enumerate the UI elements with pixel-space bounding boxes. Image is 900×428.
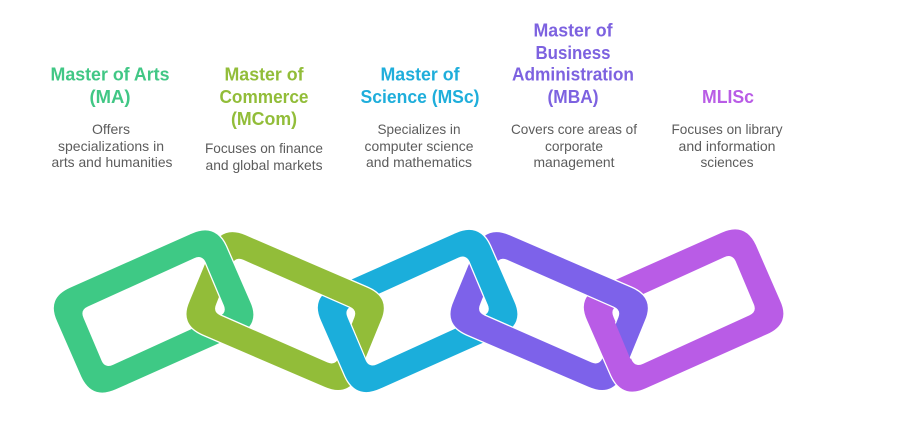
- heading: Master of Business Administration (MBA): [512, 20, 634, 107]
- heading: Master of Business Administration (MBA): Administration: [512, 64, 634, 84]
- description: MSc: [364, 121, 474, 170]
- heading: Master of Business Administration (MBA): Business: [536, 43, 610, 63]
- link: purple MBA: [450, 231, 648, 391]
- heading: Master of Arts (MA): (MA): [90, 87, 131, 107]
- text: Master of Science column: [360, 64, 480, 170]
- description: MCom: and global markets: [206, 157, 322, 173]
- description: MCom: Focuses on finance: [205, 140, 323, 156]
- description: MBA: management: [534, 154, 615, 170]
- description: MLISc: sciences: [700, 154, 754, 170]
- heading: Master of Commerce (MCom): [220, 64, 308, 129]
- link overlap: blue over purple: [454, 234, 514, 326]
- heading: Master of Commerce (MCom): (MCom): [231, 109, 297, 129]
- description: MA: [52, 121, 172, 170]
- description: MBA: [511, 121, 637, 170]
- text: MLISc column: [672, 87, 782, 170]
- heading: Master of Business Administration (MBA): Master of: [534, 20, 613, 40]
- infographic: chain of master's degrees: [52, 23, 784, 393]
- text: Master of Arts column: [50, 64, 172, 170]
- heading: Master of Science (MSc): Science (MSc): [360, 87, 480, 107]
- description: MA: Offers: [92, 121, 130, 137]
- description: MSc: Specializes in: [378, 121, 460, 137]
- description: MBA: corporate: [545, 138, 603, 154]
- link: olive MCom: [186, 231, 384, 391]
- link overlap: olive over blue: [300, 258, 379, 358]
- description: MCom: [205, 140, 323, 173]
- description: MA: specializations in: [58, 138, 164, 154]
- heading: Master of Commerce (MCom): Master of: [224, 64, 304, 84]
- heading: Master of Science (MSc): [360, 64, 480, 107]
- description: MLISc: and information: [678, 138, 776, 154]
- heading: Master of Commerce (MCom): Commerce: [220, 87, 308, 107]
- description: MLISc: Focuses on library: [672, 121, 782, 137]
- link: magenta MLISc: [583, 229, 784, 392]
- chain graphic: five interlocking links: [53, 229, 784, 393]
- text: Master of Business Administration column: [511, 20, 637, 170]
- description: MSc: and mathematics: [366, 154, 472, 170]
- link: blue MSc: [317, 229, 518, 393]
- heading: MLISc: MLISc: [702, 87, 754, 107]
- heading: Master of Business Administration (MBA): (MBA): [548, 87, 599, 107]
- description: MA: arts and humanities: [52, 154, 172, 170]
- description: MLISc: [672, 121, 782, 170]
- description: MBA: Covers core areas of: [511, 121, 637, 137]
- text: Master of Commerce column: [205, 64, 323, 173]
- link: green MA: [53, 230, 254, 393]
- link overlap: green over olive: [190, 234, 250, 326]
- heading: Master of Science (MSc): Master of: [380, 64, 460, 84]
- heading: Master of Arts (MA): [50, 64, 170, 107]
- link overlap: purple over magenta: [564, 258, 644, 359]
- heading: Master of Arts (MA): Master of Arts: [50, 64, 170, 84]
- description: MSc: computer science: [364, 138, 474, 154]
